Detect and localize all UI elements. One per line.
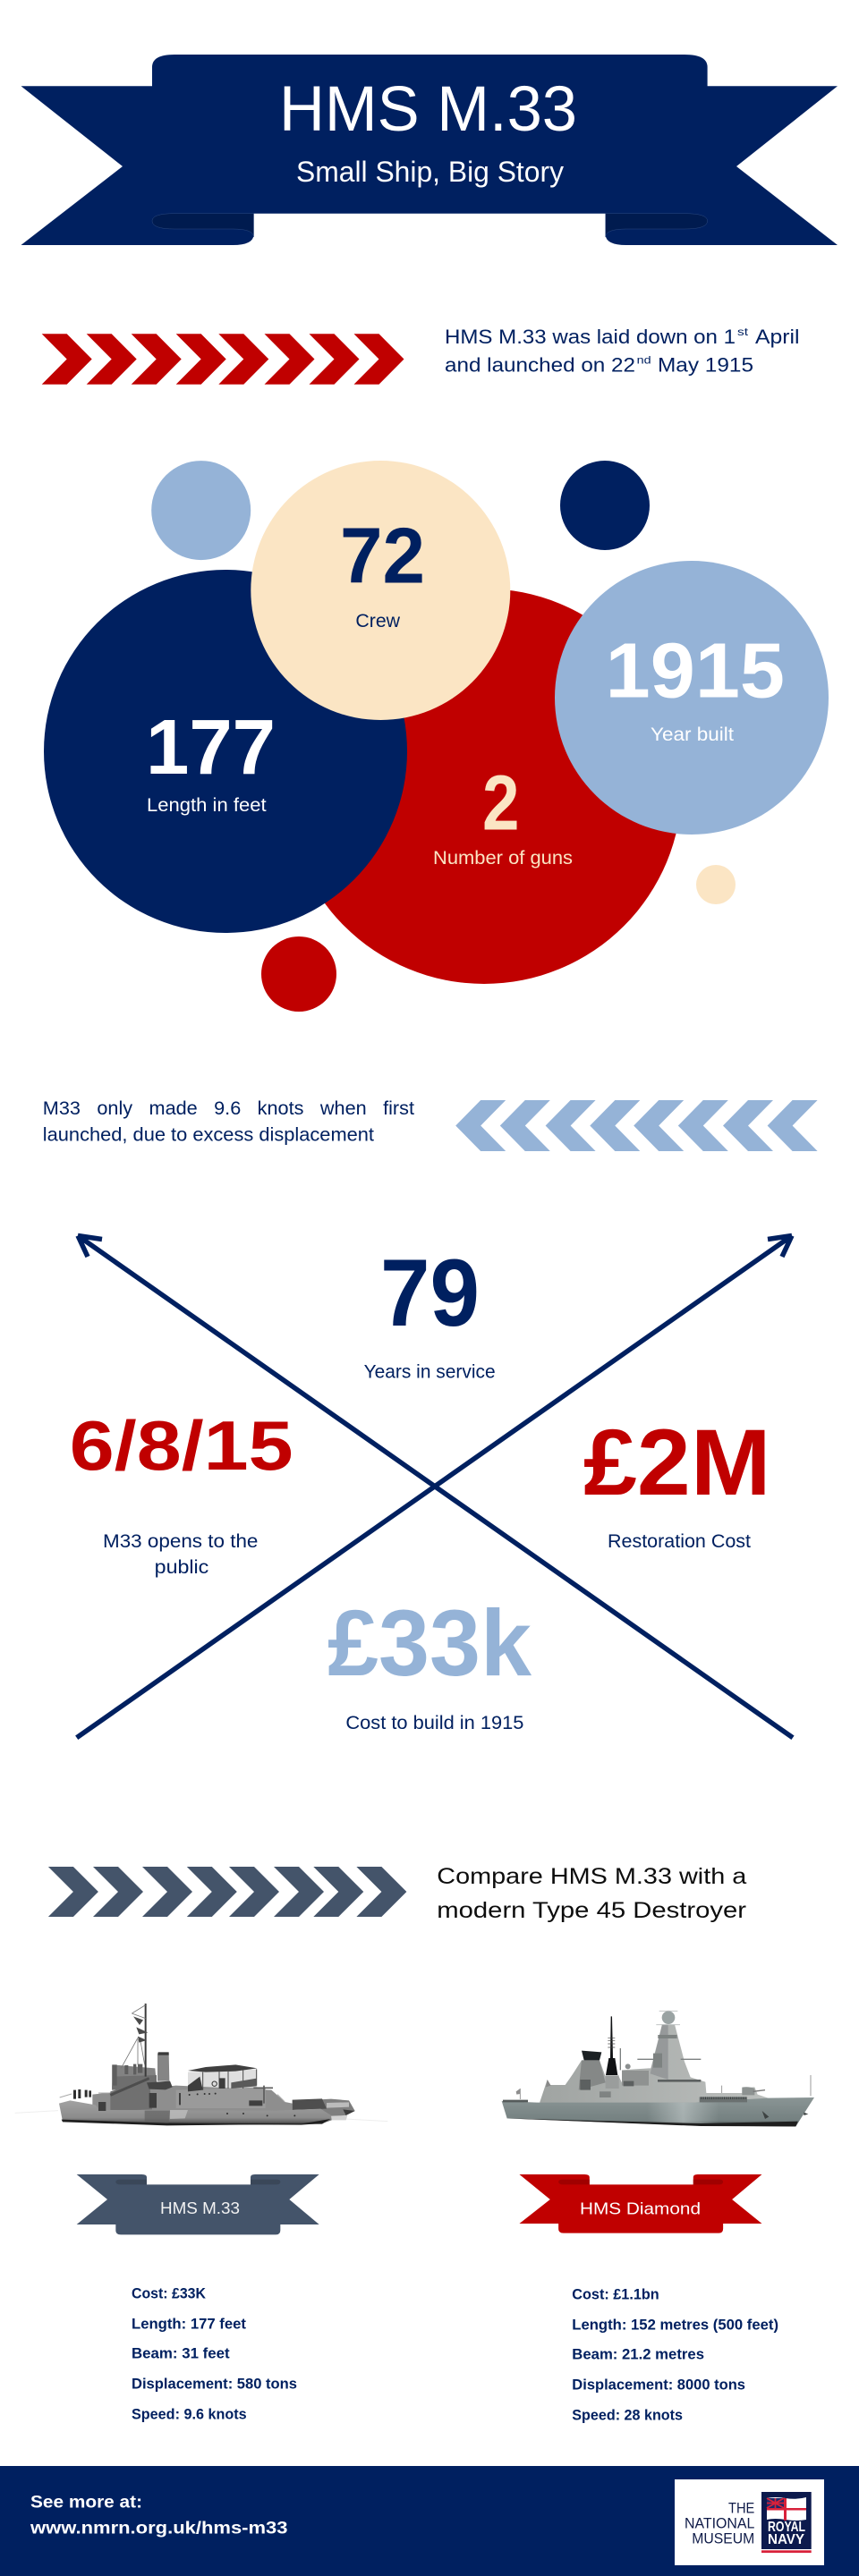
ribbon shape xyxy=(519,2174,761,2233)
decorative small light blue circle xyxy=(151,461,251,560)
text: laid down and launched: May 1915 xyxy=(658,354,753,377)
specs: HMS M.33: Displacement: 580 tons xyxy=(132,2376,297,2392)
specs: HMS Diamond: Speed: 28 knots xyxy=(572,2407,683,2423)
ribbon: HMS M.33 xyxy=(77,2174,319,2234)
specs: HMS M.33: Cost: £33K xyxy=(132,2285,206,2301)
footer band xyxy=(0,2466,859,2576)
ribbon left fold xyxy=(152,214,254,237)
red circle: number of guns xyxy=(286,589,682,984)
text: laid down and launched: st xyxy=(737,326,749,338)
heading: compare ships: Compare HMS M.33 with a xyxy=(437,1864,746,1889)
specs: HMS Diamond: Cost: £1.1bn xyxy=(572,2286,659,2302)
stat: 2: 2 xyxy=(482,759,519,846)
specs: HMS Diamond: Length: 152 metres (500 feet) xyxy=(572,2317,778,2333)
red chevrons arrow xyxy=(42,334,404,385)
logo: The National Museum Royal Navy: NAVY xyxy=(768,2532,804,2547)
decorative small red circle xyxy=(261,936,336,1012)
logo: The National Museum Royal Navy: MUSEUM xyxy=(692,2529,754,2546)
specs: HMS M.33: Speed: 9.6 knots xyxy=(132,2406,247,2422)
heading: compare ships: modern Type 45 Destroyer xyxy=(437,1898,746,1923)
stat: opening date xyxy=(70,1406,293,1578)
specs: HMS M.33: Beam: 31 feet xyxy=(132,2345,230,2361)
stat: cost to build: £33k xyxy=(327,1591,532,1696)
stat: 72: 72 xyxy=(340,512,425,600)
specs: HMS Diamond: Beam: 21.2 metres xyxy=(572,2346,704,2362)
stat: 177: Length in feet xyxy=(147,794,267,816)
decorative small cream circle xyxy=(696,865,736,904)
text: 9.6 knots: M33 only made 9.6 knots when first xyxy=(43,1098,414,1119)
stat: opening date: public xyxy=(155,1557,208,1578)
header ribbon xyxy=(21,55,838,245)
ribbon: HMS Diamond xyxy=(519,2174,761,2233)
bubble chart of key facts xyxy=(44,461,829,1012)
text: laid down and launched xyxy=(445,326,800,377)
ship illustration: HMS M.33 xyxy=(15,2004,387,2125)
stat: 2: Number of guns xyxy=(433,847,573,869)
ribbon right fold xyxy=(606,214,708,237)
heading: compare ships xyxy=(437,1864,746,1923)
specs: HMS Diamond: Displacement: 8000 tons xyxy=(572,2377,745,2393)
navy circle: length xyxy=(44,570,407,933)
text: laid down and launched: nd xyxy=(637,354,651,367)
crossed arrows xyxy=(77,1236,793,1738)
text: 9.6 knots: launched, due to excess displacement xyxy=(43,1124,374,1145)
text: laid down and launched: and launched on 22 xyxy=(445,354,635,377)
footer link text: See more at: xyxy=(30,2493,142,2512)
stat: opening date: M33 opens to the xyxy=(103,1531,258,1552)
logo: The National Museum Royal Navy: NATIONAL xyxy=(685,2515,754,2532)
slate chevrons arrow xyxy=(48,1867,406,1917)
cream circle: crew xyxy=(251,461,510,720)
specs: HMS M.33 xyxy=(132,2285,297,2422)
decorative small navy circle xyxy=(560,461,650,550)
light blue chevrons arrow xyxy=(455,1100,818,1151)
arrow: from bottom right to top left xyxy=(78,1236,793,1738)
ribbon shape xyxy=(77,2174,319,2234)
logo: The National Museum Royal Navy: THE xyxy=(728,2499,754,2516)
stat: opening date: 6/8/15 xyxy=(70,1406,293,1485)
stat: 72: Crew xyxy=(355,610,400,631)
stat: restoration cost: £2M xyxy=(583,1411,771,1515)
ribbon label: HMS Diamond xyxy=(580,2199,701,2218)
text: laid down and launched: HMS M.33 was laid down on 1 xyxy=(445,326,736,348)
specs: HMS Diamond xyxy=(572,2286,778,2423)
text: 9.6 knots xyxy=(43,1098,414,1145)
ribbon label: HMS M.33 xyxy=(160,2199,240,2217)
text: laid down and launched: April xyxy=(755,326,800,348)
stat: 1915: 1915 xyxy=(606,628,785,715)
stat: restoration cost: Restoration Cost xyxy=(608,1531,751,1552)
stat: 79 years in service: Years in service xyxy=(364,1362,496,1383)
stat: 79 years in service xyxy=(364,1239,496,1383)
title: HMS M.33 xyxy=(279,74,577,145)
arrow: from bottom left to top right xyxy=(77,1236,792,1738)
light blue circle: year built xyxy=(555,561,829,835)
stat: cost to build: Cost to build in 1915 xyxy=(345,1713,523,1733)
stat: 177: 177 xyxy=(146,704,276,791)
logo: The National Museum Royal Navy: ROYAL xyxy=(768,2520,805,2535)
stat: 2 xyxy=(433,759,573,869)
specs: HMS M.33: Length: 177 feet xyxy=(132,2316,247,2332)
ribbon shape xyxy=(21,55,838,245)
stat: 79 years in service: 79 xyxy=(380,1239,480,1346)
footer link text: www.nmrn.org.uk/hms-m33 xyxy=(30,2519,288,2538)
stat: 1915: Year built xyxy=(651,724,734,745)
ship illustration: HMS Diamond type 45 destroyer xyxy=(502,2011,814,2126)
footer link text xyxy=(30,2493,288,2538)
logo: The National Museum Royal Navy xyxy=(675,2479,824,2565)
subtitle: Small Ship, Big Story xyxy=(296,156,564,188)
